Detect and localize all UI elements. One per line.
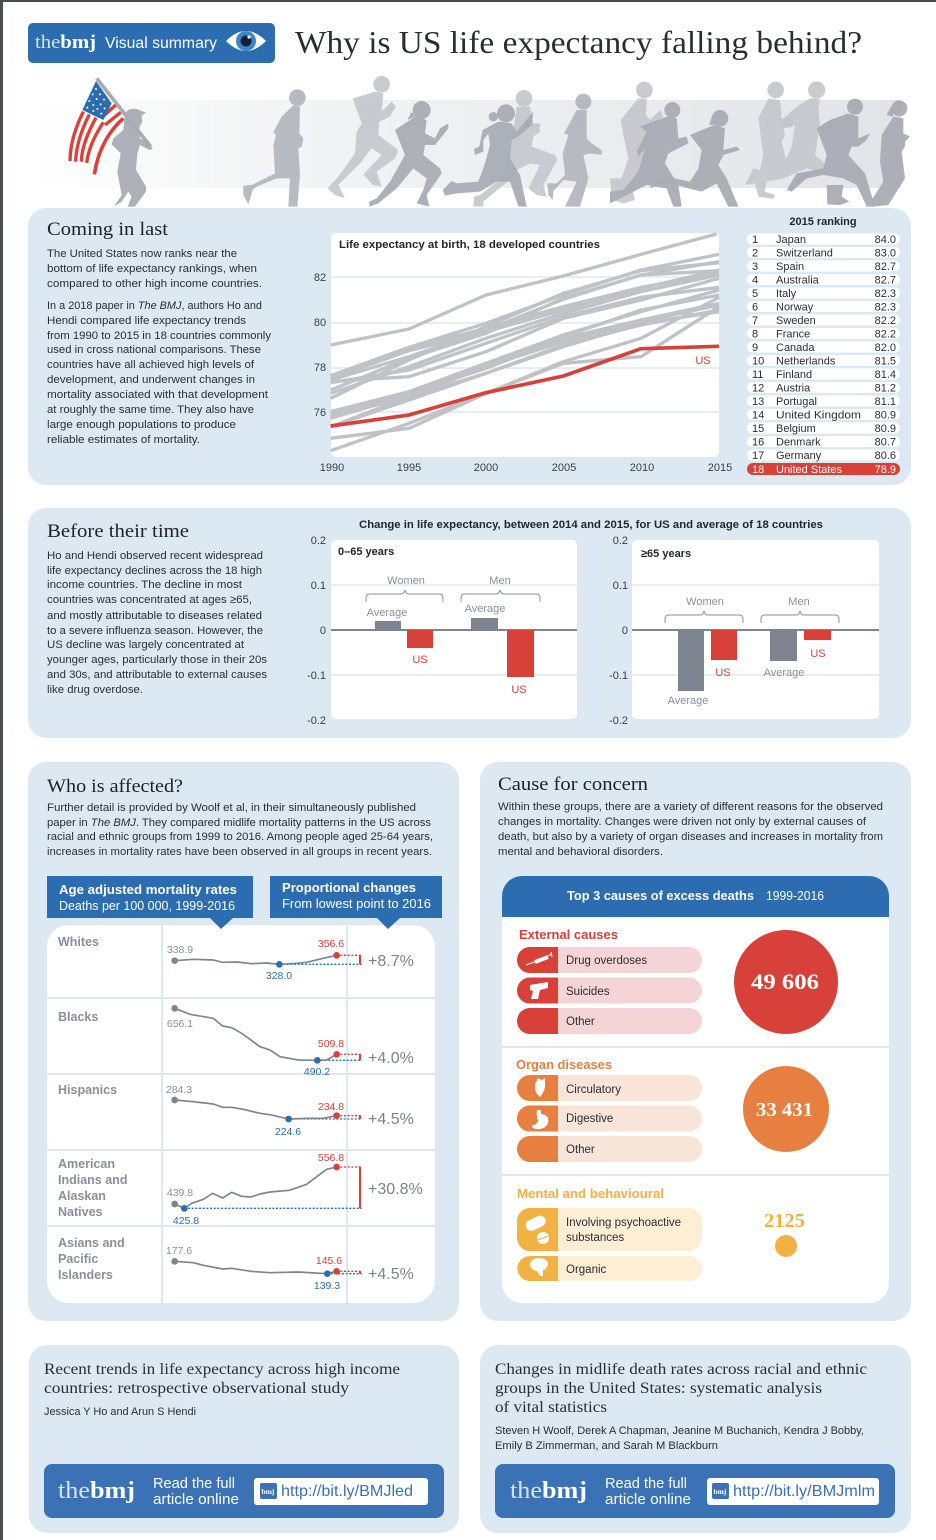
row: american indians and alaskan natives: Indians and bbox=[58, 1173, 127, 1187]
text block: like drug overdose. bbox=[47, 684, 143, 696]
group: organ diseases: Circulatory bbox=[566, 1084, 621, 1096]
row: hispanics bbox=[58, 1083, 414, 1138]
ranking table: 2015 ranking: 15 bbox=[752, 423, 764, 435]
icon: pills bbox=[524, 1214, 549, 1244]
ranking table: 2015 ranking: 6 bbox=[752, 302, 758, 314]
ranking table: 2015 ranking: 10 bbox=[752, 356, 764, 368]
text block: US decline was largely concentrated at bbox=[47, 639, 245, 651]
bar chart: 0–65 years: Men bbox=[489, 575, 511, 587]
row: asians and pacific islanders: Pacific bbox=[58, 1252, 98, 1266]
bar chart: 0–65 years: Women bbox=[387, 575, 425, 587]
bar chart: 0–65 years: Average bbox=[367, 607, 407, 619]
ranking table: 2015 ranking: 82.3 bbox=[875, 302, 896, 314]
row: whites bbox=[58, 935, 414, 982]
ranking table: 2015 ranking: Norway bbox=[776, 302, 814, 314]
heading: Who is affected? bbox=[47, 776, 183, 797]
row: american indians and alaskan natives: American bbox=[58, 1157, 115, 1171]
link bar bbox=[495, 1464, 895, 1518]
circle: 49 606 bbox=[734, 930, 838, 1034]
link bar: Read the full bbox=[605, 1475, 687, 1492]
text block: development, and underwent changes in bbox=[47, 374, 255, 386]
article title bbox=[44, 1361, 400, 1397]
line chart: life expectancy at birth: 82 bbox=[314, 272, 326, 284]
row: asians and pacific islanders: 139.3 bbox=[314, 1280, 340, 1292]
text block: Within these groups, there are a variety of different reasons for the observed bbox=[498, 801, 883, 813]
ranking table: 2015 ranking: 12 bbox=[752, 382, 764, 394]
runners: middle group bbox=[327, 76, 602, 207]
article title: groups in the United States: systematic analysis bbox=[495, 1380, 822, 1397]
bar chart: 65 years and over bbox=[609, 535, 879, 727]
text block: countries was concentrated at ages ≥65, bbox=[47, 594, 252, 606]
ranking table: 2015 ranking: Italy bbox=[776, 288, 797, 300]
group: mental and behavioural bbox=[517, 1186, 805, 1281]
text block: The United States now ranks near the bbox=[47, 248, 237, 260]
article title: of vital statistics bbox=[495, 1399, 607, 1416]
bar chart: 65 years and over: Men bbox=[788, 596, 810, 608]
tab: proportional changes: Proportional changes bbox=[282, 881, 416, 895]
bar chart: 65 years and over: Women bbox=[686, 596, 724, 608]
row: american indians and alaskan natives: 425.8 bbox=[173, 1215, 199, 1227]
text block: and mostly attributable to diseases related bbox=[47, 610, 262, 622]
bar chart: 65 years and over: 0 bbox=[622, 625, 628, 637]
ranking table: 2015 ranking: United States bbox=[776, 464, 843, 476]
ranking table: 2015 ranking: 82.0 bbox=[875, 342, 896, 354]
text block bbox=[498, 801, 883, 858]
ranking table: 2015 ranking: Portugal bbox=[776, 396, 817, 408]
card header: Top 3 causes of excess deaths bbox=[567, 888, 754, 903]
row: american indians and alaskan natives: Alaskan bbox=[58, 1189, 106, 1203]
bar chart: 0–65 years: 0.2 bbox=[311, 535, 326, 547]
causes card bbox=[502, 876, 889, 1303]
icon: heart bbox=[535, 1078, 545, 1097]
heading: Cause for concern bbox=[498, 774, 649, 795]
ranking table: 2015 ranking: 1 bbox=[752, 234, 758, 246]
circle: 33 431 bbox=[743, 1066, 829, 1152]
link bar: bmj bbox=[714, 1487, 727, 1496]
ranking table: 2015 ranking: 4 bbox=[752, 274, 758, 286]
ranking table: 2015 ranking: 81.5 bbox=[875, 356, 896, 368]
ranking table: 2015 ranking: Finland bbox=[776, 369, 812, 381]
panel: cause for concern bbox=[480, 762, 911, 1321]
text block bbox=[47, 802, 433, 858]
line chart: life expectancy at birth: 2000 bbox=[474, 462, 498, 474]
text block: younger ages, particularly those in their 20s bbox=[47, 654, 267, 666]
heading: Coming in last bbox=[47, 219, 169, 240]
row: blacks: 656.1 bbox=[167, 1018, 193, 1030]
ranking table: 2015 ranking: Australia bbox=[776, 274, 820, 286]
runners: right group bbox=[610, 81, 910, 207]
ranking table: 2015 ranking: Denmark bbox=[776, 436, 821, 448]
ranking table: 2015 ranking: 18 bbox=[752, 464, 764, 476]
ranking table: 2015 ranking: Spain bbox=[776, 261, 804, 273]
text block: bottom of life expectancy rankings, when bbox=[47, 263, 257, 275]
icon: eye bbox=[226, 31, 266, 51]
ranking table: 2015 ranking: 84.0 bbox=[875, 234, 896, 246]
authors bbox=[495, 1425, 864, 1452]
text block: from 1990 to 2015 in 18 countries commonly bbox=[47, 330, 271, 342]
header badge: thebmj Visual summary bbox=[28, 23, 275, 63]
row: american indians and alaskan natives: Natives bbox=[58, 1205, 103, 1219]
text block: reliable estimates of mortality. bbox=[47, 434, 200, 446]
bar chart: 65 years and over: US bbox=[715, 667, 731, 679]
group: external causes bbox=[517, 927, 838, 1034]
ranking table: 2015 ranking: Japan bbox=[776, 234, 806, 246]
tab: age adjusted mortality rates bbox=[47, 876, 253, 929]
icon: flag bearer bbox=[69, 78, 153, 207]
row: asians and pacific islanders: 145.6 bbox=[316, 1255, 342, 1267]
bar chart: 65 years and over: Average bbox=[668, 695, 708, 707]
line chart: life expectancy at birth bbox=[314, 233, 732, 474]
panel: Ho and Hendi article bbox=[29, 1345, 459, 1533]
ranking table: 2015 ranking: 81.1 bbox=[875, 396, 896, 408]
ranking table: 2015 ranking: France bbox=[776, 328, 810, 340]
row: blacks: 490.2 bbox=[304, 1066, 330, 1078]
text block: changes in mortality. Changes were driven not only by external causes of bbox=[498, 816, 867, 828]
ranking table: 2015 ranking: 2 bbox=[752, 248, 758, 260]
line chart: life expectancy at birth: US bbox=[695, 355, 711, 367]
bar chart: 0–65 years: 0–65 years bbox=[338, 546, 394, 558]
text block: Hendi compared life expectancy trends bbox=[47, 315, 246, 327]
ranking table: 2015 ranking: Switzerland bbox=[776, 248, 833, 260]
circle: 49 606: 49 606 bbox=[751, 969, 819, 994]
ranking table: 2015 ranking: 80.6 bbox=[875, 450, 896, 462]
line chart: life expectancy at birth: 2015 bbox=[708, 462, 732, 474]
row: whites: +8.7% bbox=[368, 953, 414, 970]
group: external causes: Drug overdoses bbox=[566, 955, 647, 967]
group: organ diseases: Digestive bbox=[566, 1113, 613, 1125]
text block: large enough populations to produce bbox=[47, 419, 236, 431]
row: hispanics: 234.8 bbox=[318, 1101, 344, 1113]
group: organ diseases: Other bbox=[566, 1144, 595, 1156]
line chart: life expectancy at birth: 2010 bbox=[630, 462, 654, 474]
heading: Before their time bbox=[47, 521, 189, 542]
ranking table: 2015 ranking: 11 bbox=[752, 369, 763, 381]
link bar: http://bit.ly/BMJled bbox=[281, 1483, 413, 1500]
ranking table: 2015 ranking: Germany bbox=[776, 450, 822, 462]
group: external causes: Suicides bbox=[566, 986, 610, 998]
ranking table: 2015 ranking: 3 bbox=[752, 261, 758, 273]
icon: stomach bbox=[532, 1110, 548, 1129]
article title: Changes in midlife death rates across racial and ethnic bbox=[495, 1361, 867, 1378]
row: whites: 338.9 bbox=[167, 944, 193, 956]
text block: income countries. The decline in most bbox=[47, 579, 243, 591]
ranking table: 2015 ranking: 82.7 bbox=[875, 261, 896, 273]
ranking table: 2015 ranking: 8 bbox=[752, 328, 758, 340]
circle: 2125: 2125 bbox=[764, 1210, 805, 1232]
text block: death, but also by a variety of organ diseases and increases in mortality from bbox=[498, 831, 883, 843]
ranking table: 2015 ranking bbox=[747, 216, 900, 476]
group: mental and behavioural: Organic bbox=[566, 1264, 607, 1276]
link bar: article online bbox=[153, 1491, 239, 1508]
row: hispanics: Hispanics bbox=[58, 1083, 117, 1097]
link bar: article online bbox=[605, 1491, 691, 1508]
tab: age adjusted mortality rates: Deaths per 100 000, 1999-2016 bbox=[59, 899, 235, 913]
panel: Woolf article bbox=[480, 1345, 911, 1533]
row: hispanics: 224.6 bbox=[275, 1126, 301, 1138]
text block bbox=[47, 550, 267, 696]
panel: coming in last bbox=[28, 208, 911, 485]
row: american indians and alaskan natives: 556.8 bbox=[318, 1152, 344, 1164]
group: mental and behavioural: Mental and behavioural bbox=[517, 1186, 664, 1201]
line chart: life expectancy at birth: 2005 bbox=[552, 462, 576, 474]
ranking table: 2015 ranking: 80.7 bbox=[875, 436, 896, 448]
ranking table: 2015 ranking: 13 bbox=[752, 396, 764, 408]
row: asians and pacific islanders: 177.6 bbox=[166, 1245, 192, 1257]
text block: to a severe influenza season. However, the bbox=[47, 625, 263, 637]
bar chart: 0–65 years: US bbox=[412, 654, 428, 666]
row: whites: 328.0 bbox=[266, 970, 292, 982]
authors: Jessica Y Ho and Arun S Hendi bbox=[44, 1406, 196, 1418]
group: organ diseases bbox=[516, 1057, 829, 1162]
row: asians and pacific islanders bbox=[58, 1236, 414, 1292]
row: blacks: 509.8 bbox=[318, 1038, 344, 1050]
link bar: http://bit.ly/BMJmlm bbox=[733, 1483, 875, 1500]
article title: countries: retrospective observational study bbox=[44, 1380, 349, 1397]
bar chart: 65 years and over: US bbox=[810, 648, 826, 660]
bar chart: 65 years and over: 0.2 bbox=[613, 535, 628, 547]
line chart: life expectancy at birth: Life expectancy at birth, 18 developed countries bbox=[339, 239, 600, 251]
text block: compared to other high income countries. bbox=[47, 278, 262, 290]
group: mental and behavioural: substances bbox=[566, 1232, 624, 1244]
line chart: life expectancy at birth: 76 bbox=[314, 407, 326, 419]
row: blacks: Blacks bbox=[58, 1010, 98, 1024]
ranking table: 2015 ranking: United Kingdom bbox=[776, 410, 861, 422]
ranking table: 2015 ranking: 17 bbox=[752, 450, 764, 462]
article title: Recent trends in life expectancy across high income bbox=[44, 1361, 400, 1378]
row: blacks: +4.0% bbox=[368, 1050, 414, 1067]
text block: paper in The BMJ. They compared midlife mortality patterns in the US across bbox=[47, 817, 431, 829]
ranking table: 2015 ranking: 81.2 bbox=[875, 382, 896, 394]
circle: 33 431: 33 431 bbox=[756, 1099, 813, 1121]
tab: proportional changes bbox=[270, 876, 442, 929]
row: blacks bbox=[58, 1005, 414, 1078]
ranking table: 2015 ranking: 7 bbox=[752, 315, 758, 327]
text block: mortality associated with that development bbox=[47, 389, 269, 401]
runner 1 bbox=[243, 89, 306, 207]
banner: runners overtaking the flag bearer bbox=[30, 76, 910, 207]
ranking table: 2015 ranking: 82.7 bbox=[875, 274, 896, 286]
bar chart: 65 years and over: -0.2 bbox=[609, 715, 628, 727]
text block: life expectancy declines across the 18 high bbox=[47, 565, 262, 577]
ranking table: 2015 ranking: 82.2 bbox=[875, 315, 896, 327]
link bar: Read the full bbox=[153, 1475, 235, 1492]
line chart: life expectancy at birth: 78 bbox=[314, 362, 326, 374]
icon: pistol bbox=[530, 982, 548, 999]
bar chart: 65 years and over: ≥65 years bbox=[641, 548, 691, 560]
text block: In a 2018 paper in The BMJ, authors Ho and bbox=[47, 300, 262, 312]
tab: age adjusted mortality rates: Age adjusted mortality rates bbox=[59, 883, 237, 897]
line chart: life expectancy at birth: 1995 bbox=[397, 462, 421, 474]
ranking table: 2015 ranking: 80.9 bbox=[875, 423, 896, 435]
ranking table: 2015 ranking: 16 bbox=[752, 436, 764, 448]
bar chart: 65 years and over: -0.1 bbox=[609, 670, 628, 682]
row: whites: Whites bbox=[58, 935, 99, 949]
row: asians and pacific islanders: Islanders bbox=[58, 1268, 113, 1282]
ranking table: 2015 ranking: 83.0 bbox=[875, 248, 896, 260]
chart title: Change in life expectancy, between 2014 and 2015, for US and average of 18 countries bbox=[359, 519, 823, 531]
ranking table: 2015 ranking: 2015 ranking bbox=[789, 216, 857, 228]
ranking table: 2015 ranking: 14 bbox=[752, 410, 764, 422]
card header bbox=[502, 876, 889, 917]
row: asians and pacific islanders: +4.5% bbox=[368, 1266, 414, 1283]
ranking table: 2015 ranking: 78.9 bbox=[875, 464, 896, 476]
ranking table: 2015 ranking: Netherlands bbox=[776, 356, 836, 368]
bar chart: 0–65 years bbox=[307, 535, 577, 727]
authors: Emily B Zimmerman, and Sarah M Blackburn bbox=[495, 1440, 718, 1452]
row: whites: 356.6 bbox=[318, 938, 344, 950]
bar chart: 65 years and over: 0.1 bbox=[613, 580, 628, 592]
row: hispanics: 284.3 bbox=[166, 1084, 192, 1096]
card header: 1999-2016 bbox=[766, 888, 824, 903]
ranking table: 2015 ranking: Canada bbox=[776, 342, 815, 354]
group: organ diseases: Organ diseases bbox=[516, 1057, 612, 1072]
group: external causes: Other bbox=[566, 1016, 595, 1028]
panel: who is affected bbox=[28, 762, 459, 1321]
link bar: thebmj bbox=[510, 1478, 587, 1504]
bar chart: 0–65 years: 0 bbox=[320, 625, 326, 637]
row: hispanics: +4.5% bbox=[368, 1111, 414, 1128]
icon: syringe bbox=[526, 952, 552, 965]
line chart: life expectancy at birth: 1990 bbox=[320, 462, 344, 474]
line chart: life expectancy at birth: 80 bbox=[314, 317, 326, 329]
ranking table: 2015 ranking: Belgium bbox=[776, 423, 816, 435]
text block: racial and ethnic groups from 1999 to 2016. Among people aged 25-64 years, bbox=[47, 831, 433, 843]
group: external causes: External causes bbox=[519, 927, 618, 942]
link bar: bmj bbox=[262, 1487, 275, 1496]
ranking table: 2015 ranking: 82.2 bbox=[875, 328, 896, 340]
title: Why is US life expectancy falling behind? bbox=[295, 24, 862, 60]
text block: used in cross national comparisons. These bbox=[47, 344, 261, 356]
text block: mental and behavioral disorders. bbox=[498, 846, 663, 858]
authors: Steven H Woolf, Derek A Chapman, Jeanine M Buchanich, Kendra J Bobby, bbox=[495, 1425, 864, 1437]
link bar: thebmj bbox=[58, 1478, 135, 1504]
row: american indians and alaskan natives: 439.8 bbox=[167, 1187, 193, 1199]
bar chart: 0–65 years: Average bbox=[465, 603, 505, 615]
panel: before their time bbox=[28, 508, 911, 738]
row: american indians and alaskan natives bbox=[58, 1152, 423, 1227]
mortality table bbox=[47, 876, 442, 1303]
ranking table: 2015 ranking: Austria bbox=[776, 382, 811, 394]
article title bbox=[495, 1361, 867, 1416]
bar chart: 0–65 years: -0.1 bbox=[307, 670, 326, 682]
bar chart: 0–65 years: US bbox=[511, 684, 527, 696]
ranking table: 2015 ranking: 80.9 bbox=[875, 410, 896, 422]
text block: countries have all achieved high levels of bbox=[47, 359, 255, 371]
circle: 2125 bbox=[764, 1210, 805, 1257]
group: mental and behavioural: Involving psychoactive bbox=[566, 1217, 681, 1229]
ranking table: 2015 ranking: Sweden bbox=[776, 315, 816, 327]
header badge: thebmj Visual summary: thebmj bbox=[35, 32, 96, 53]
text block: and 30s, and attributable to external causes bbox=[47, 669, 267, 681]
ranking table: 2015 ranking: 81.4 bbox=[875, 369, 896, 381]
tab: proportional changes: From lowest point to 2016 bbox=[282, 897, 431, 911]
text block: Ho and Hendi observed recent widespread bbox=[47, 550, 263, 562]
text block: Further detail is provided by Woolf et al, in their simultaneously published bbox=[47, 802, 416, 814]
row: american indians and alaskan natives: +30.8% bbox=[368, 1181, 423, 1198]
bar chart: 65 years and over: Average bbox=[764, 667, 804, 679]
text block: at roughly the same time. They also have bbox=[47, 404, 254, 416]
text block bbox=[47, 248, 271, 446]
icon: brain bbox=[530, 1258, 548, 1276]
bar chart: 0–65 years: 0.1 bbox=[311, 580, 326, 592]
ranking table: 2015 ranking: 5 bbox=[752, 288, 758, 300]
link bar bbox=[44, 1464, 444, 1518]
bar chart: 0–65 years: -0.2 bbox=[307, 715, 326, 727]
text block: increases in mortality rates have been observed in all groups in recent years. bbox=[47, 846, 432, 858]
header badge: thebmj Visual summary: Visual summary bbox=[105, 35, 217, 52]
row: asians and pacific islanders: Asians and bbox=[58, 1236, 125, 1250]
ranking table: 2015 ranking: 82.3 bbox=[875, 288, 896, 300]
ranking table: 2015 ranking: 9 bbox=[752, 342, 758, 354]
